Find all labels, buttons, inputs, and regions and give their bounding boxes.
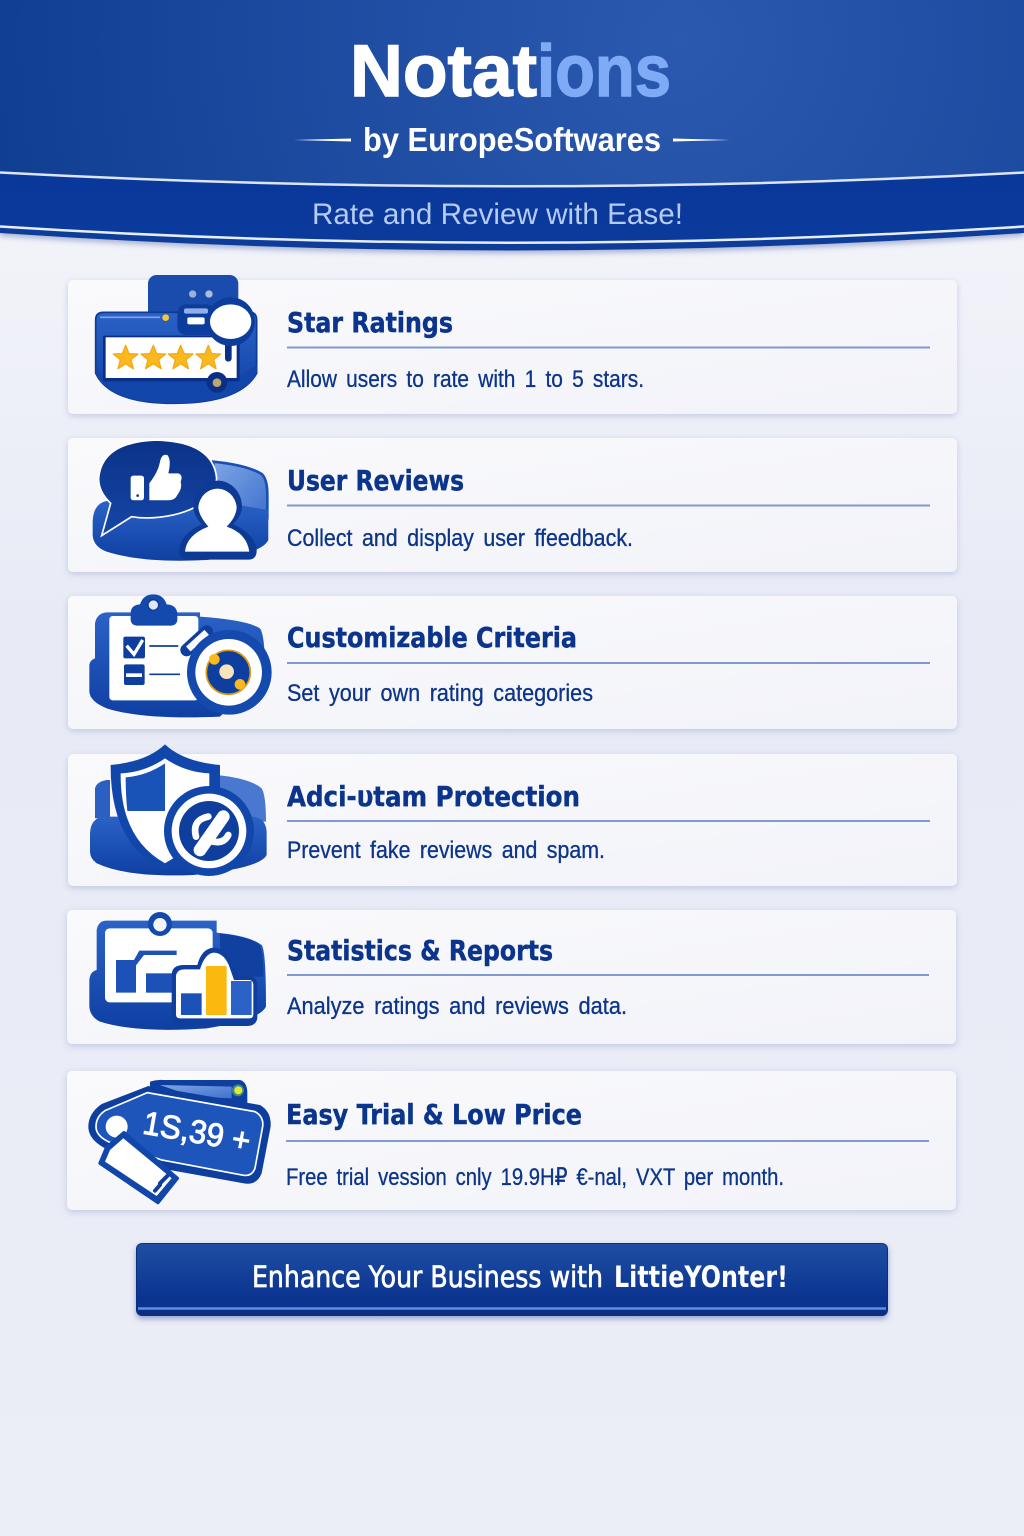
description: Collect and display user ffeedback. xyxy=(287,525,633,552)
header banner xyxy=(0,0,1024,250)
panel: adci-utam protection xyxy=(68,744,957,886)
heading: Easy Trial & Low Price xyxy=(286,1098,582,1131)
title: ions xyxy=(537,31,671,112)
panel: easy trial and low price xyxy=(67,1071,956,1210)
icon: thumbs up and user xyxy=(93,440,268,561)
call to action button: LittieYOnter! xyxy=(614,1260,788,1294)
icon: price tag xyxy=(88,1080,271,1203)
tagline: Rate and Review with Ease! xyxy=(312,198,683,231)
title: Notat xyxy=(350,31,537,112)
heading: Adci-υtam Protection xyxy=(287,780,580,813)
call to action button xyxy=(136,1243,888,1316)
description: Allow users to rate with 1 to 5 stars. xyxy=(287,366,644,393)
icon: report and bar chart xyxy=(89,912,266,1030)
heading: Star Ratings xyxy=(287,306,453,339)
description: Set your own rating categories xyxy=(287,680,593,707)
icon: clipboard and dial xyxy=(89,594,272,717)
icon: star rating card xyxy=(96,275,257,403)
heading: User Reviews xyxy=(287,464,464,497)
panel: statistics and reports xyxy=(67,910,956,1044)
heading: Customizable Criteria xyxy=(287,621,577,654)
description: Analyze ratings and reviews data. xyxy=(287,993,627,1020)
panel: user reviews xyxy=(68,438,957,572)
call to action button: Enhance Your Business with xyxy=(252,1260,603,1294)
icon: shield and wrench xyxy=(90,744,267,876)
panel: star ratings xyxy=(68,275,957,414)
title xyxy=(350,31,671,112)
panel: customizable criteria xyxy=(68,594,957,729)
description: Free trial vession cnly 19.9H₽ €-nal, VXT per month. xyxy=(286,1164,784,1191)
icon: price tag: 1S,39 + xyxy=(140,1104,254,1159)
description: Prevent fake reviews and spam. xyxy=(287,837,605,864)
subtitle: by EuropeSoftwares xyxy=(363,121,661,158)
heading: Statistics & Reports xyxy=(287,934,553,967)
